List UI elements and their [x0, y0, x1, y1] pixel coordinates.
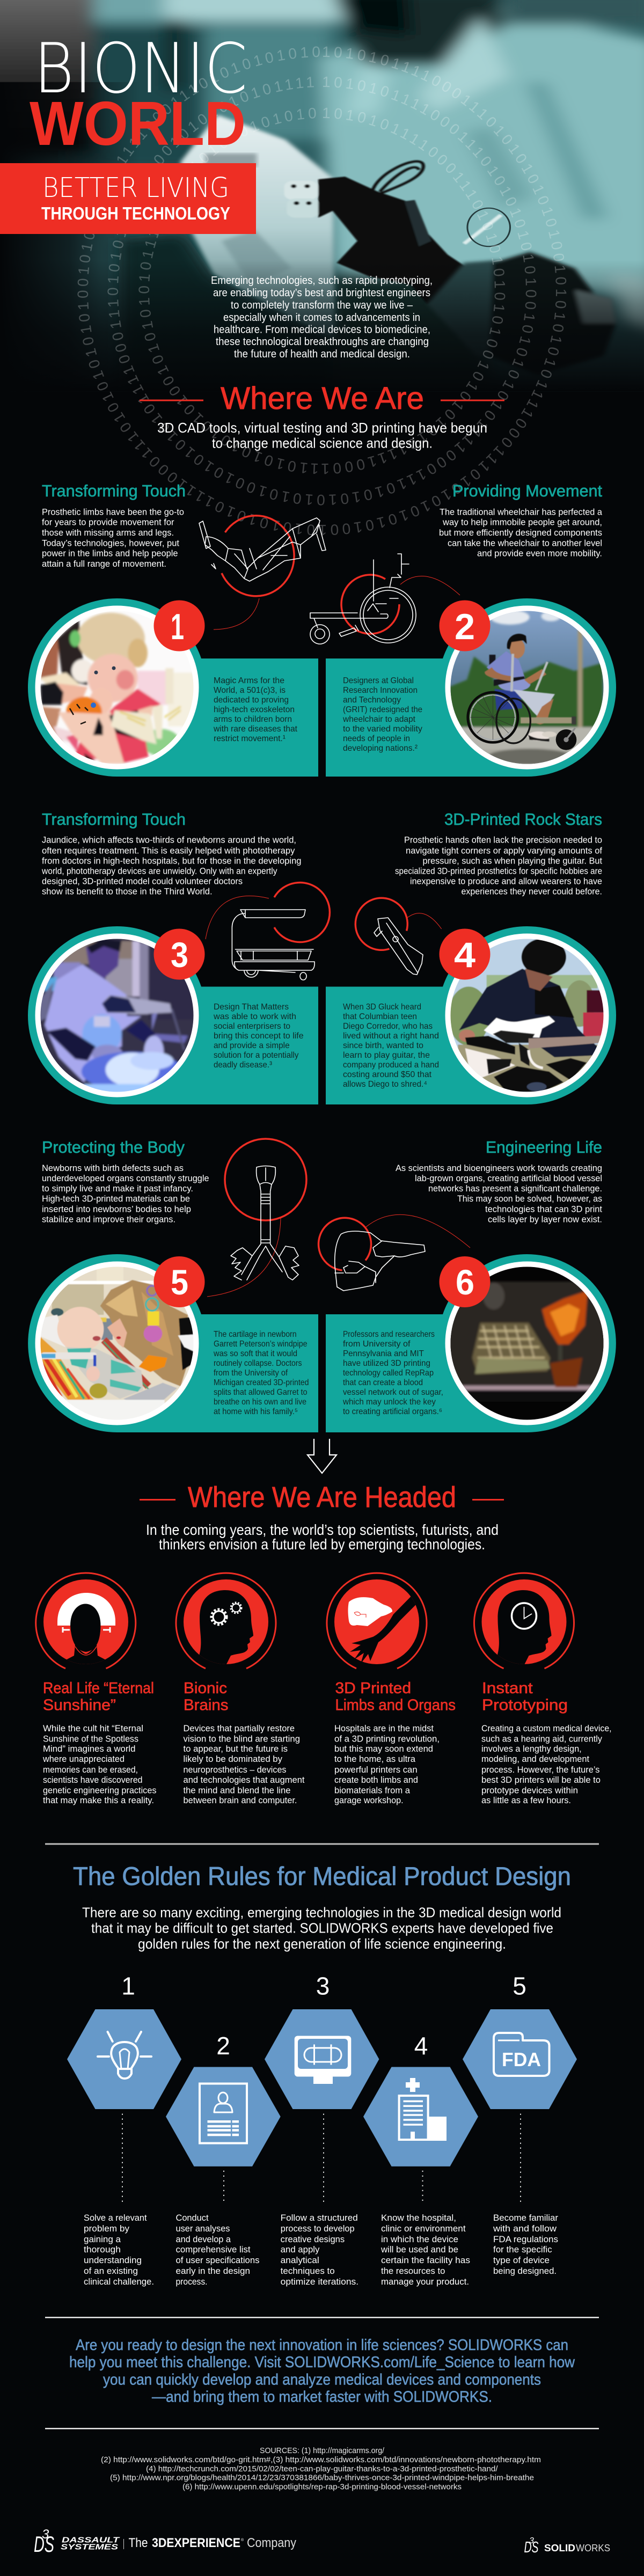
title: BIONIC: [34, 29, 247, 109]
panel text: from the University of: [214, 1368, 288, 1378]
rule text: user analyses: [176, 2224, 230, 2234]
subtitle banner: BETTER LIVING: [42, 172, 229, 204]
panel text: Professors and researchers: [343, 1330, 435, 1339]
rule text: of user specifications: [176, 2256, 260, 2265]
block: protecting the body: to simply live and make it past infancy.: [42, 1183, 193, 1194]
block: protecting the body: [42, 1138, 209, 1225]
panel text: that Columbian teen: [343, 1012, 417, 1021]
block: protecting the body: stabilize and improve their organs.: [42, 1214, 175, 1225]
panel text: restrict movement.¹: [214, 734, 286, 743]
number badge 4: 4: [454, 935, 475, 975]
panel text: Garrett Peterson’s windpipe: [214, 1340, 308, 1349]
rule text: clinical challenge.: [84, 2277, 154, 2287]
rule text: FDA regulations: [493, 2235, 558, 2244]
rule 4: 4: [414, 2032, 428, 2060]
column: bionic brains: vision to the blind are starting: [184, 1733, 300, 1744]
rule text: manage your product.: [381, 2277, 469, 2287]
block: 3d-printed rock stars: experiences they never could before.: [462, 887, 602, 897]
call to action: [69, 2337, 575, 2405]
arrow: down: [308, 1439, 336, 1473]
column: instant prototyping: process. However, the future’s: [481, 1765, 599, 1775]
golden rules intro: that it may be difficult to get started. SOLIDWORKS experts have developed five: [91, 1920, 553, 1936]
column: eternal sunshine: Real Life “Eternal: [43, 1680, 154, 1697]
number badge 2: [439, 600, 491, 652]
panel text: [213, 1002, 304, 1070]
intro text: are enabling today’s best and brightest engineers: [213, 287, 430, 299]
column: instant prototyping: such as a hearing aid, currently: [481, 1733, 602, 1744]
rule 1: 1: [121, 1972, 135, 2000]
block: engineering life: As scientists and bioengineers work towards creating: [396, 1163, 602, 1173]
block: transforming touch 2: show its benefit to those in the Third World.: [42, 887, 213, 897]
block: protecting the body: inserted into newborns’ bodies to help: [42, 1204, 191, 1214]
block: providing movement: [439, 481, 603, 559]
rule text: creative designs: [281, 2235, 345, 2244]
logo: solidworks: 3: [529, 2536, 534, 2545]
rule text: process.: [176, 2277, 207, 2287]
panel text: dedicated to proving: [214, 696, 289, 705]
column: eternal sunshine: While the cult hit “Eternal: [43, 1723, 143, 1733]
rule text: being designed.: [493, 2266, 557, 2276]
rule 2: 2: [216, 2032, 230, 2060]
panel text: Design That Matters: [214, 1002, 289, 1012]
rule text: early in the design: [176, 2266, 250, 2276]
intro text: the future of health and medical design.: [234, 348, 410, 360]
number badge 5: 5: [171, 1262, 188, 1302]
column: eternal sunshine: that may make this a reality.: [43, 1795, 154, 1805]
column: eternal sunshine: genetic engineering practices: [43, 1785, 157, 1795]
block: engineering life: technologies that can 3D print: [485, 1204, 602, 1214]
panel text: which may unlock the key: [342, 1397, 436, 1407]
rule text: Know the hospital,: [381, 2213, 456, 2223]
panel text: at home with his family.⁵: [214, 1407, 298, 1416]
block: transforming touch 1: Today’s technologies, however, put: [42, 538, 179, 548]
logo: dassault systemes: 3: [42, 2527, 49, 2542]
icon: printed limbs and organs: [327, 1573, 427, 1668]
column: eternal sunshine: Mind” imagines a world: [43, 1744, 135, 1754]
photo: doctor with phototherapy lamp: [36, 935, 200, 1096]
panel: step 1: [28, 598, 318, 777]
column: bionic brains: and technologies that augment: [184, 1775, 305, 1785]
golden rules intro: There are so many exciting, emerging technologies in the 3D medical design world: [82, 1904, 561, 1920]
panel text: wheelchair to adapt: [342, 715, 416, 724]
column: instant prototyping: Creating a custom medical device,: [481, 1723, 612, 1733]
rule 3: [265, 1972, 379, 2287]
rule text: and apply: [281, 2245, 320, 2255]
column: 3d printed limbs: to the home, as ultra: [334, 1754, 416, 1764]
logo: dassault systemes: SYSTEMES: [61, 2543, 118, 2551]
block: transforming touch 1: Transforming Touch: [42, 481, 186, 500]
block: providing movement: way to help immobile people get around,: [442, 517, 602, 528]
column: 3d printed limbs: 3D Printed: [335, 1680, 411, 1697]
rule text: Solve a relevant: [84, 2213, 147, 2223]
block: transforming touch 1: those with missing arms and legs.: [42, 528, 174, 538]
logo: solidworks: WORKS: [576, 2543, 610, 2553]
panel text: Diego Corredor, who has: [343, 1022, 433, 1031]
where we are intro: [157, 420, 487, 451]
headed intro: thinkers envision a future led by emerging technologies.: [159, 1536, 485, 1553]
panel text: [213, 676, 298, 743]
icon: user document: [200, 2083, 247, 2143]
number badge 4: [439, 928, 491, 980]
panel: step 3: [28, 926, 318, 1104]
icon: light bulb: [98, 2032, 151, 2079]
where we are intro: to change medical science and design.: [212, 435, 433, 451]
panel: step 6: [326, 1254, 616, 1432]
block: transforming touch 1: attain a full range of movement.: [42, 559, 166, 569]
panel text: The cartilage in newborn: [214, 1330, 297, 1339]
column: bionic brains: between brain and computer.: [184, 1795, 297, 1805]
block: transforming touch 1: for years to provide movement for: [42, 517, 174, 528]
number badge 6: 6: [456, 1262, 474, 1302]
logo: dassault systemes: 3DEXPERIENCE: [152, 2536, 240, 2550]
column: eternal sunshine: where unappreciated: [42, 1754, 125, 1764]
rule text: Follow a structured: [281, 2213, 358, 2223]
panel text: Pennsylvania and MIT: [343, 1349, 424, 1358]
rule text: comprehensive list: [176, 2245, 251, 2255]
panel text: Magic Arms for the: [214, 676, 284, 685]
rule text: gaining a: [84, 2235, 121, 2244]
golden rules intro: [82, 1904, 561, 1952]
column: bionic brains: likely to be dominated by: [184, 1754, 282, 1764]
intro text: healthcare. From medical devices to biomedicine,: [214, 324, 430, 336]
panel text: solution for a potentially: [214, 1051, 298, 1060]
icon: instant prototyping clock head: [474, 1573, 574, 1668]
column: instant prototyping: Instant: [482, 1680, 533, 1697]
block: providing movement: but more efficiently designed components: [439, 528, 602, 538]
panel text: World, a 501(c)3, is: [214, 686, 286, 695]
column: instant prototyping: involves a lengthy design,: [481, 1744, 582, 1754]
panel text: (GRIT) redesigned the: [343, 705, 422, 714]
call to action: you can quickly develop and analyze medical devices and components: [103, 2371, 541, 2388]
rule 1: [67, 1972, 181, 2287]
panel text: arms to children born: [214, 715, 292, 724]
block: providing movement: and provide even more mobility.: [477, 548, 602, 559]
rule text: in which the device: [381, 2235, 458, 2244]
call to action: Are you ready to design the next innovation in life sciences? SOLIDWORKS can: [76, 2337, 568, 2354]
column: instant prototyping: prototype devices within: [481, 1785, 578, 1795]
block: providing movement: can take the wheelchair to another level: [448, 538, 602, 548]
block: providing movement: The traditional wheelchair has perfected a: [440, 507, 603, 517]
logo: dassault systemes: DS: [34, 2531, 54, 2557]
logo: dassault systemes: Company: [247, 2536, 296, 2550]
icon: bionic brain: [176, 1573, 276, 1668]
column: bionic brains: [184, 1680, 305, 1805]
rule text: analytical: [281, 2256, 319, 2265]
panel text: breathe on his own and live: [214, 1397, 306, 1407]
block: 3d-printed rock stars: inexpensive to produce and allow wearers to have: [410, 876, 602, 886]
column: bionic brains: the mind and blend the line: [184, 1785, 291, 1795]
icon: FDA folder: FDA: [502, 2048, 541, 2070]
number badge 1: [153, 600, 205, 652]
icon: phototherapy device: [206, 882, 330, 980]
heading: golden rules: The Golden Rules for Medical Product Design: [73, 1863, 571, 1891]
column: bionic brains: Bionic: [184, 1680, 227, 1697]
block: transforming touch 1: power in the limbs and help people: [42, 548, 178, 559]
column: eternal sunshine: Sunshine”: [43, 1697, 116, 1714]
number badge 3: [153, 928, 205, 980]
column: 3d printed limbs: powerful printers can: [334, 1765, 418, 1775]
sources: (5) http://www.npr.org/blogs/health/2014/12/23/370381866/baby-thrives-once-3d-printed-windpipe-helps-him-breathe: [110, 2474, 534, 2483]
icon: liver: [319, 1214, 470, 1291]
column: bionic brains: to appear, but the future is: [184, 1744, 288, 1754]
block: 3d-printed rock stars: 3D-Printed Rock Stars: [444, 810, 602, 829]
title: WORLD: [30, 89, 246, 158]
panel text: was so soft that it would: [213, 1349, 297, 1358]
column: eternal sunshine: [42, 1680, 157, 1805]
photo: 3D printed sugar network: [448, 1264, 609, 1425]
column: bionic brains: Brains: [184, 1697, 229, 1714]
rule 5: 5: [513, 1972, 526, 2000]
column: 3d printed limbs: garage workshop.: [334, 1795, 404, 1805]
panel text: bring this concept to life: [214, 1031, 304, 1041]
subtitle banner: THROUGH TECHNOLOGY: [41, 203, 230, 223]
number badge 2: 2: [455, 606, 475, 647]
hero photo: man with prosthetic arm: [0, 0, 644, 430]
panel text: technology called RepRap: [343, 1368, 434, 1378]
sources: (6) http://www.upenn.edu/spotlights/rep-rap-3d-printing-blood-vessel-networks: [182, 2483, 462, 2491]
panel text: have utilized 3D printing: [343, 1359, 430, 1368]
number badge 1: 1: [171, 606, 184, 647]
sources: (4) http://techcrunch.com/2015/02/02/teen-can-play-guitar-thanks-to-a-3d-printed-prosthetic-hand/: [146, 2465, 499, 2473]
block: engineering life: cells layer by layer now exist.: [488, 1214, 602, 1225]
golden rules intro: golden rules for the next generation of life science engineering.: [138, 1936, 506, 1952]
intro text: [211, 275, 433, 360]
heading: where we are headed: Where We Are Headed: [188, 1481, 456, 1513]
logo: dassault systemes: ®: [241, 2538, 244, 2542]
panel text: developing nations.²: [343, 744, 418, 753]
panel text: company produced a hand: [343, 1060, 439, 1070]
panel text: Research Innovation: [343, 686, 418, 695]
panel text: high-tech exoskeleton: [214, 705, 295, 714]
icon: prosthetic hand: [355, 898, 442, 975]
panel text: that can create a blood: [343, 1378, 423, 1387]
block: transforming touch 1: Prosthetic limbs have been the go-to: [42, 507, 184, 517]
column: bionic brains: neuroprosthetics – devices: [184, 1765, 287, 1775]
rule 5: [463, 1972, 577, 2276]
icon: computer monitor: [295, 2036, 351, 2084]
rule text: will be used and be: [380, 2245, 458, 2255]
photo: man in wheelchair: [451, 611, 603, 764]
column: 3d printed limbs: create both limbs and: [334, 1775, 418, 1785]
panel text: deadly disease.³: [214, 1060, 273, 1070]
panel: step 5: [28, 1254, 318, 1432]
block: engineering life: networks has present a significant challenge.: [428, 1183, 602, 1194]
block: engineering life: lab-grown organs, creating artificial blood vessel: [415, 1173, 602, 1183]
block: 3d-printed rock stars: specialized 3D-printed prosthetics for specific hobbies are: [395, 866, 602, 876]
block: transforming touch 2: Jaundice, which affects two-thirds of newborns around the world,: [42, 835, 296, 845]
logo: solidworks: SOLID: [544, 2543, 575, 2553]
rule text: [84, 2213, 154, 2287]
icon: hospital: [399, 2078, 447, 2141]
panel text: [343, 1002, 439, 1089]
column: 3d printed limbs: Hospitals are in the midst: [334, 1723, 434, 1733]
where we are intro: 3D CAD tools, virtual testing and 3D printing have begun: [157, 420, 487, 436]
panel text: costing around $50 that: [343, 1070, 432, 1079]
column: 3d printed limbs: biomaterials from a: [334, 1785, 411, 1795]
photo: teen playing guitar: [444, 935, 608, 1096]
intro text: Emerging technologies, such as rapid prototyping,: [211, 275, 433, 287]
panel: step 2: [326, 598, 616, 777]
column: 3d printed limbs: of a 3D printing revolution,: [334, 1733, 440, 1744]
logo: solidworks: DS: [524, 2539, 539, 2556]
block: 3d-printed rock stars: navigate tight corners or apply varying amounts of: [406, 846, 602, 856]
panel text: [342, 1330, 443, 1416]
photo: girl with exoskeleton arms: [38, 609, 199, 770]
panel text: needs of people in: [343, 734, 410, 743]
sources: [101, 2447, 541, 2491]
panel text: and Technology: [343, 696, 401, 705]
icon: memory magnet head: [36, 1573, 136, 1668]
sources: (2) http://www.solidworks.com/btd/go-grit.htm#,(3) http://www.solidworks.com/btd/innovations/newborn-phototherapy.htm: [101, 2456, 541, 2464]
block: transforming touch 2: often requires treatment. This is easily helped with phototherapy: [42, 846, 295, 856]
rule text: [493, 2213, 559, 2276]
panel text: and provide a simple: [214, 1041, 290, 1050]
block: 3d-printed rock stars: [395, 810, 602, 897]
column: bionic brains: Devices that partially restore: [184, 1723, 295, 1733]
panel text: [213, 1330, 309, 1416]
block: engineering life: Engineering Life: [486, 1138, 602, 1157]
panel text: routinely collapse. Doctors: [214, 1359, 302, 1368]
logo: dassault systemes: DASSAULT: [62, 2535, 120, 2545]
panel text: social enterprisers to: [214, 1022, 290, 1031]
photo: baby and mother: [36, 1263, 200, 1424]
panel text: with rare diseases that: [213, 724, 298, 734]
rule text: problem by: [84, 2224, 130, 2234]
panel text: allows Diego to shred.⁴: [343, 1080, 427, 1089]
column: eternal sunshine: Sunshine of the Spotless: [43, 1733, 138, 1744]
column: instant prototyping: best 3D printers will be able to: [481, 1775, 601, 1785]
column: instant prototyping: modeling, and development: [481, 1754, 589, 1764]
call to action: —and bring them to market faster with SOLIDWORKS.: [152, 2388, 492, 2405]
panel text: [342, 676, 422, 753]
rule text: process to develop: [281, 2224, 355, 2234]
intro text: to completely transform the way we live –: [231, 299, 413, 311]
block: protecting the body: Protecting the Body: [42, 1138, 185, 1157]
rule text: optimize iterations.: [281, 2277, 358, 2287]
icon: prosthetic arm: [199, 516, 326, 630]
rule text: of an existing: [84, 2266, 138, 2276]
rule text: [176, 2213, 260, 2287]
rule text: [281, 2213, 358, 2287]
panel text: to creating artificial organs.⁶: [343, 1407, 442, 1416]
block: transforming touch 2: from doctors in high-tech hospitals, but for those in the developing: [42, 855, 302, 866]
block: transforming touch 2: world, phototherapy devices are unwieldy. Only with an expertly: [41, 866, 277, 876]
block: providing movement: Providing Movement: [452, 481, 602, 500]
panel text: lived without a right hand: [343, 1031, 439, 1041]
column: instant prototyping: [481, 1680, 612, 1805]
block: engineering life: This may soon be solved, however, as: [457, 1194, 602, 1204]
panel text: from University of: [343, 1340, 411, 1349]
block: protecting the body: underdeveloped organs constantly struggle: [42, 1173, 209, 1183]
logo: solidworks: [524, 2536, 610, 2556]
block: transforming touch 2: designed, 3D-printed model could volunteer doctors: [42, 876, 243, 886]
block: protecting the body: High-tech 3D-printed materials can be: [42, 1194, 190, 1204]
rule 2: [166, 2032, 281, 2287]
logo: dassault systemes: The: [129, 2536, 148, 2550]
rule text: thorough: [84, 2245, 121, 2255]
rule text: type of device: [493, 2256, 550, 2265]
rule text: with and follow: [493, 2224, 557, 2234]
block: transforming touch 2: Transforming Touch: [42, 810, 186, 829]
column: instant prototyping: Prototyping: [482, 1697, 568, 1714]
number badge 6: [439, 1256, 491, 1307]
icon: wheelchair: [310, 554, 460, 644]
column: eternal sunshine: scientists have discovered: [43, 1775, 143, 1785]
panel text: When 3D Gluck heard: [343, 1002, 421, 1012]
block: protecting the body: Newborns with birth defects such as: [42, 1163, 184, 1173]
panel text: Michigan created 3D-printed: [214, 1378, 309, 1387]
subtitle banner: [0, 163, 256, 234]
column: 3d printed limbs: Limbs and Organs: [335, 1697, 456, 1714]
block: engineering life: [396, 1138, 602, 1225]
rule text: techniques to: [281, 2266, 335, 2276]
panel: step 4: [326, 926, 616, 1104]
rule 3: 3: [316, 1972, 330, 2000]
panel text: learn to play guitar, the: [343, 1051, 430, 1060]
panel text: vessel network out of sugar,: [343, 1388, 443, 1397]
headed intro: [146, 1521, 499, 1553]
number badge 5: [153, 1256, 205, 1307]
headed intro: In the coming years, the world’s top scientists, futurists, and: [146, 1521, 499, 1538]
block: transforming touch 2: [41, 810, 302, 897]
rule text: the resources to: [381, 2266, 445, 2276]
column: instant prototyping: as little as a few hours.: [481, 1795, 571, 1805]
call to action: help you meet this challenge. Visit SOLIDWORKS.com/Life_Science to learn how: [69, 2354, 575, 2371]
column: 3d printed limbs: [334, 1680, 456, 1805]
intro text: these technological breakthroughs are changing: [216, 336, 429, 348]
block: 3d-printed rock stars: Prosthetic hands often lack the precision needed to: [404, 835, 602, 845]
intro text: especially when it comes to advancements in: [223, 312, 420, 324]
heading: where we are: [140, 381, 504, 416]
column: 3d printed limbs: but this may soon extend: [334, 1744, 433, 1754]
rule text: [380, 2213, 470, 2287]
panel text: Designers at Global: [343, 676, 414, 685]
rule text: certain the facility has: [381, 2256, 470, 2265]
rule text: for the specific: [493, 2245, 552, 2255]
rule text: and develop a: [176, 2235, 231, 2244]
panel text: since birth, wanted to: [343, 1041, 423, 1050]
sources: SOURCES: (1) http://magicarms.org/: [260, 2447, 385, 2455]
panel text: to the varied mobility: [343, 724, 422, 734]
logo: dassault systemes: [34, 2527, 296, 2557]
rule text: Conduct: [176, 2213, 209, 2223]
column: eternal sunshine: memories can be erased,: [43, 1765, 138, 1775]
rule text: clinic or environment: [381, 2224, 466, 2234]
rule text: Become familiar: [493, 2213, 559, 2223]
panel text: splits that allowed Garret to: [214, 1388, 308, 1397]
rule 4: [363, 2032, 478, 2287]
block: transforming touch 1: [42, 481, 186, 569]
title: [30, 29, 247, 158]
icon: trachea and lungs: [207, 1139, 306, 1297]
number badge 3: 3: [171, 935, 188, 975]
icon: FDA folder: [494, 2033, 550, 2076]
heading: where we are: Where We Are: [221, 381, 424, 416]
block: 3d-printed rock stars: pressure, such as when playing the guitar. But: [423, 855, 602, 866]
rule text: understanding: [84, 2256, 142, 2265]
panel text: was able to work with: [213, 1012, 296, 1021]
